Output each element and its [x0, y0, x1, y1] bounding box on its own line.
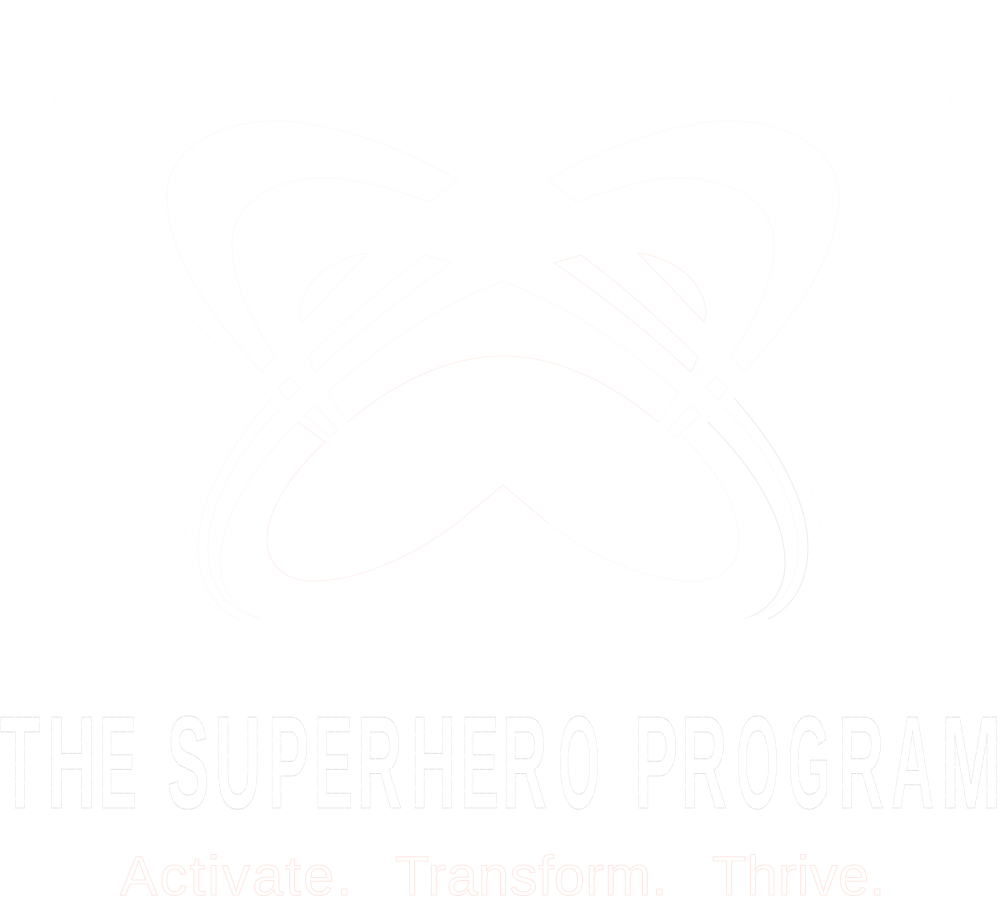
centre chevron band: [327, 281, 679, 422]
outer wing outline: [54, 2, 952, 620]
left lens: [300, 253, 368, 322]
title: R: [502, 689, 547, 836]
right crossing diamonds: [668, 377, 728, 437]
title: E: [99, 689, 137, 836]
title: R: [357, 689, 402, 836]
right narrow band: [554, 255, 698, 372]
inner ring: [267, 422, 548, 581]
left narrow band: [308, 255, 452, 372]
logo emblem: [54, 2, 952, 620]
upper left band: [167, 121, 458, 372]
title: A: [891, 689, 934, 836]
title: R: [681, 689, 727, 836]
tagline: [120, 844, 885, 897]
left crossing diamonds: [278, 377, 338, 437]
centre diamond: [477, 203, 530, 233]
upper right band: [548, 121, 839, 372]
chevron inner arc: [348, 356, 658, 422]
title: P: [268, 689, 309, 836]
right lens: [638, 253, 706, 322]
title: U: [215, 689, 261, 836]
title: H: [411, 689, 456, 836]
title: G: [788, 689, 830, 836]
right lower bands: [708, 398, 808, 619]
title: E: [461, 689, 499, 836]
title: T: [0, 689, 40, 836]
title: S: [167, 689, 209, 836]
left lower bands: [198, 398, 298, 619]
title: H: [47, 689, 96, 836]
title: E: [314, 689, 353, 836]
title: R: [838, 689, 884, 836]
title: O: [736, 689, 779, 836]
title: [0, 689, 1001, 836]
title: P: [634, 689, 678, 836]
title: O: [558, 689, 600, 836]
